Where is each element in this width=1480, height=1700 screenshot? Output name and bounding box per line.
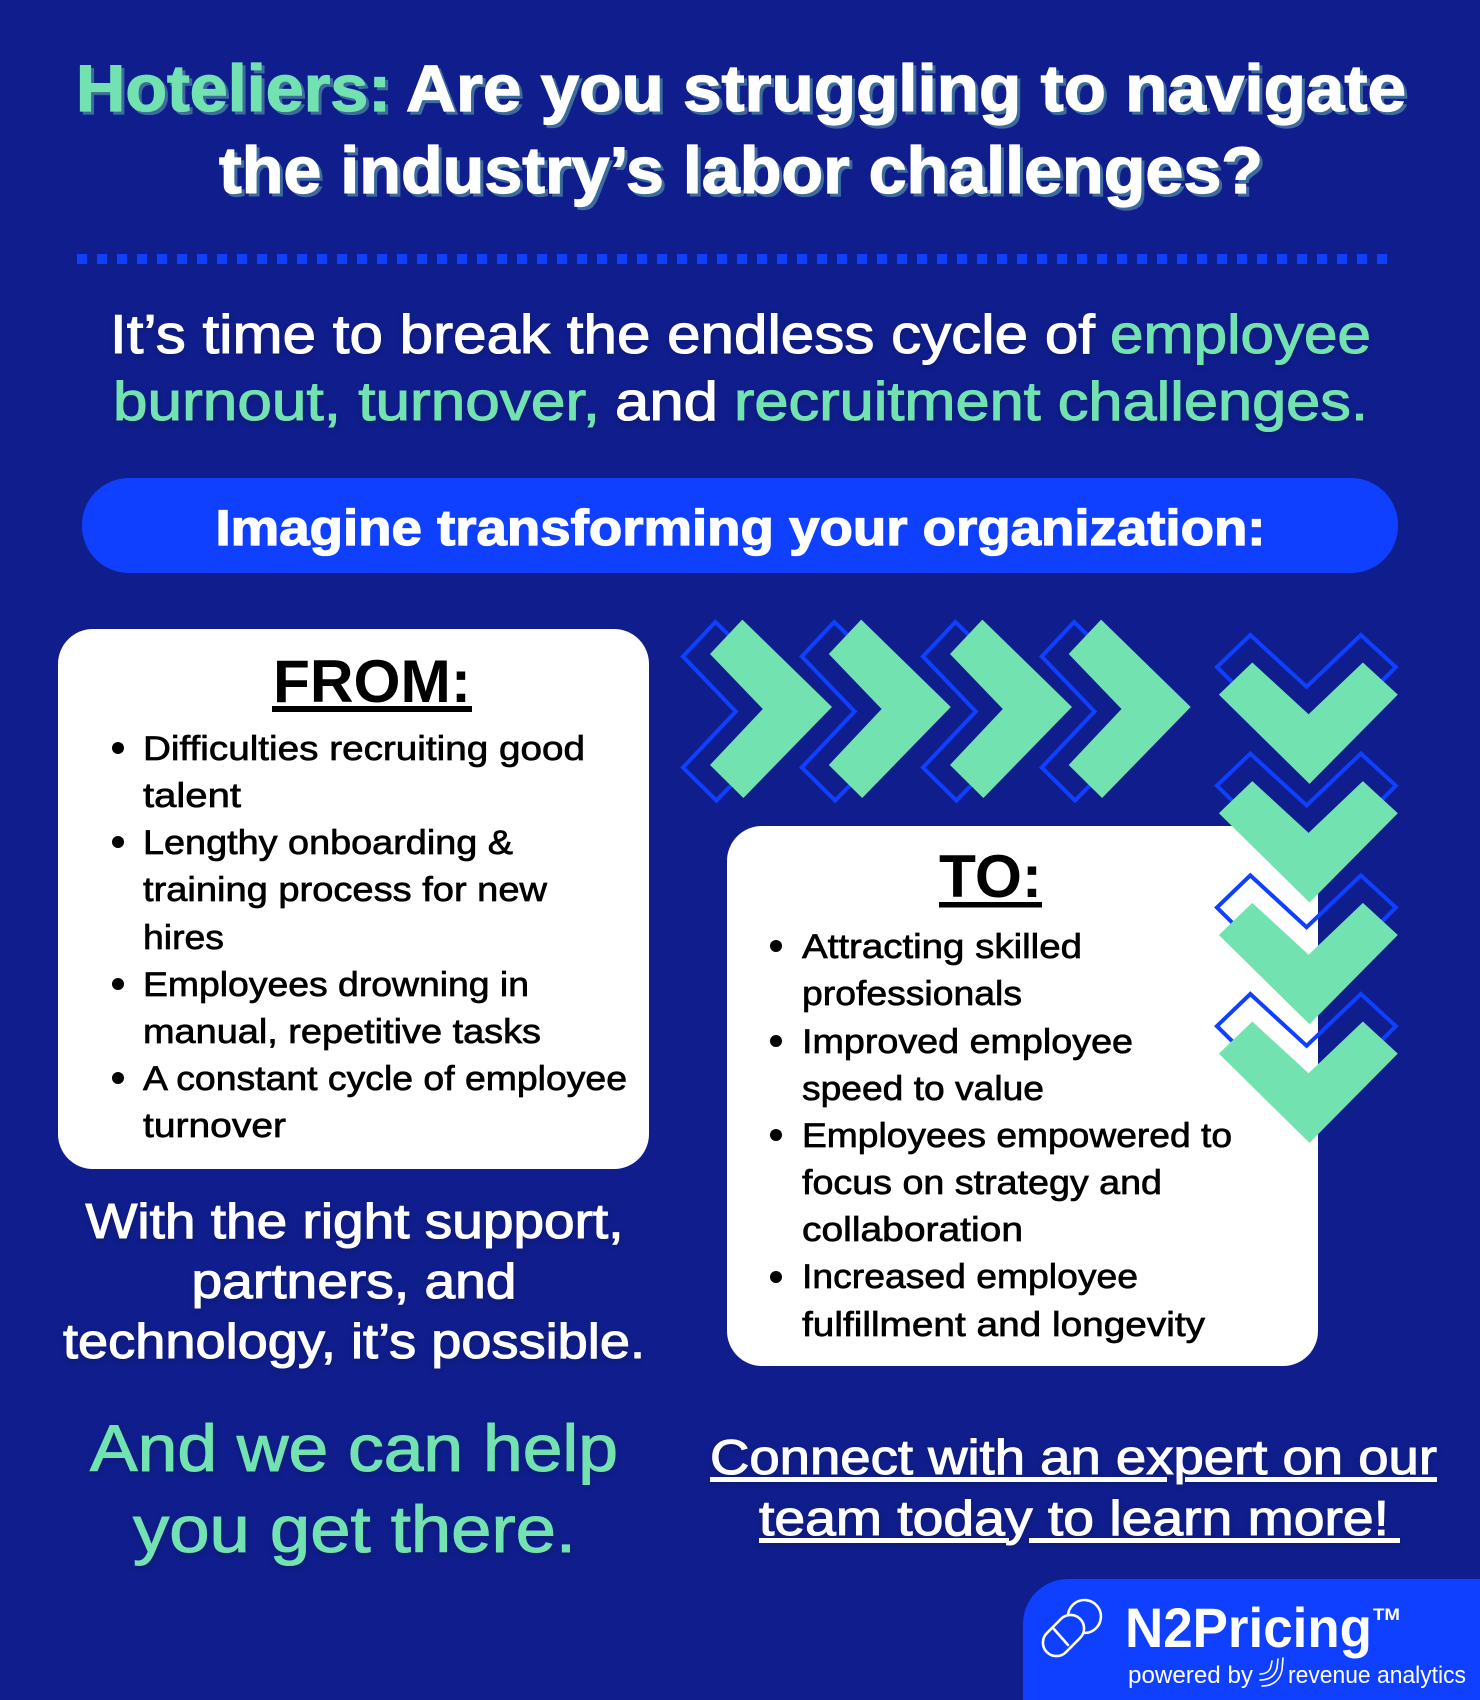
title: Are you struggling to navigate (406, 51, 1406, 125)
text: and we can help: you get there. (133, 1492, 576, 1566)
call to action: team today to learn more! (759, 1492, 1389, 1546)
logo: n2pricing badge: TM (1373, 1605, 1400, 1624)
list: from items: Difficulties recruiting good (143, 730, 585, 768)
logo: n2pricing badge: powered by (1128, 1662, 1253, 1689)
arrows: horizontal chevrons (683, 620, 1191, 800)
list: to items: Improved employee (802, 1023, 1133, 1061)
panel: from (58, 629, 649, 1169)
logo: n2pricing badge: revenue analytics (1288, 1662, 1466, 1689)
subheading (110, 303, 1371, 432)
list: to items: Attracting skilled (802, 928, 1082, 966)
heading: from: FROM: (273, 648, 471, 715)
title: the industry’s labor challenges? (219, 133, 1263, 207)
heading: to: TO: (939, 843, 1042, 910)
subheading: and (615, 370, 718, 432)
title: Hoteliers: (76, 51, 391, 125)
list: from items: training process for new (143, 871, 547, 909)
list: to items: professionals (802, 975, 1022, 1013)
list: from items: turnover (143, 1107, 286, 1145)
subheading: burnout, turnover, (113, 370, 600, 432)
logo: n2pricing badge: N2Pricing (1125, 1596, 1372, 1659)
list: to items: collaboration (802, 1211, 1023, 1249)
text: and we can help: And we can help (90, 1411, 618, 1485)
banner: imagine transforming (82, 478, 1398, 573)
list: to items: focus on strategy and (802, 1164, 1162, 1202)
list: to items (770, 928, 1232, 1344)
title (76, 51, 1406, 207)
subheading: employee (1110, 303, 1371, 365)
list: to items: Increased employee (802, 1258, 1138, 1296)
list: from items: hires (143, 919, 224, 957)
icon: revenue analytics mark (1260, 1658, 1283, 1686)
list: to items: Employees empowered to (802, 1117, 1232, 1155)
subheading: recruitment challenges. (734, 370, 1368, 432)
call to action (710, 1431, 1437, 1546)
call to action: Connect with an expert on our (710, 1431, 1437, 1485)
list: from items (112, 730, 627, 1145)
text: with the right support: With the right support, (86, 1195, 624, 1249)
subheading: It’s time to break the endless cycle of (110, 303, 1096, 365)
logo: n2pricing badge (1023, 1579, 1480, 1700)
text: with the right support (63, 1195, 645, 1369)
banner: imagine transforming: Imagine transforming your organization: (216, 500, 1266, 556)
text: with the right support: technology, it’s possible. (63, 1315, 645, 1369)
list: from items: talent (143, 777, 242, 815)
panel: to (727, 826, 1318, 1366)
icon: link pill (1037, 1600, 1101, 1662)
list: to items: fulfillment and longevity (802, 1306, 1205, 1344)
list: from items: A constant cycle of employee (143, 1060, 627, 1098)
list: to items: speed to value (802, 1070, 1044, 1108)
list: from items: manual, repetitive tasks (143, 1013, 541, 1051)
text: and we can help (90, 1411, 618, 1566)
list: from items: Lengthy onboarding & (143, 824, 513, 862)
arrows: vertical chevrons (1217, 635, 1398, 1143)
text: with the right support: partners, and (192, 1255, 516, 1309)
list: from items: Employees drowning in (143, 966, 529, 1004)
